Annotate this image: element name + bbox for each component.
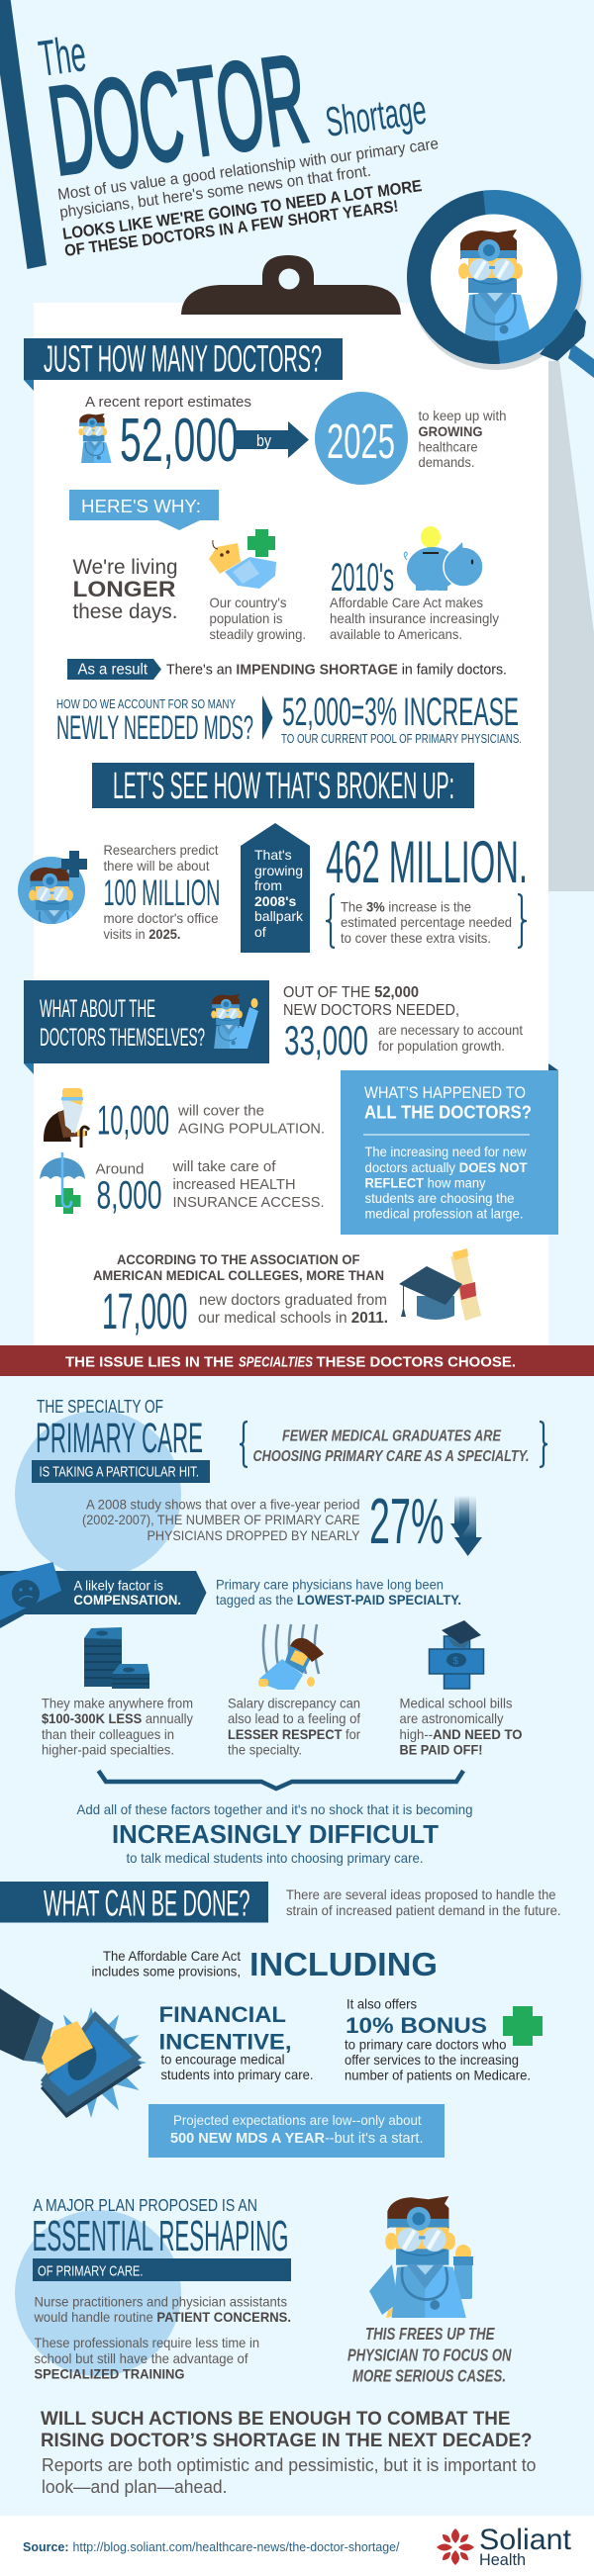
text: new doctors graduated: new doctors graduated from [199,1292,387,1309]
stat: 2010's: 2010's [331,556,394,599]
text: affordable care act [330,595,499,642]
stat circle: 2025 [315,392,408,485]
text: 100 million visits: 100 MILLION [103,873,220,913]
decorative circle: reshaping [15,2210,181,2376]
stat: 27%: 27% [369,1485,444,1557]
panel: growing from 2008: 2008's [254,893,296,909]
closing question [41,2409,537,2497]
callout: frees up the physician: THIS FREES UP THE [365,2324,495,2344]
stat: 52,000: 52,000 [120,407,239,475]
text column: school bills: Medical school bills [400,1696,513,1711]
tag: as a result: As a result [77,661,148,679]
icon: elderly man with cane [44,1088,89,1148]
callout: projected expectations [148,2104,445,2158]
callout: frees up the physician: MORE SERIOUS CASES. [352,2366,506,2386]
reason: living longer: LONGER [73,577,176,601]
text column: less annually: than their colleagues in [42,1726,174,1742]
heading: essential reshaping: A MAJOR PLAN PROPOSED IS AN [34,2195,257,2215]
text: several ideas: There are several ideas proposed to handle the [286,1886,556,1902]
text column: less annually: $100-300K LESS annually [42,1710,193,1726]
text: new doctors graduated [198,1292,388,1327]
text: 100 million visits: more doctor's office [103,910,219,926]
arrow: by: by [256,431,271,450]
question: newly needed mds [56,696,253,747]
text: growing demands: demands. [418,454,475,470]
text: insurance access: INSURANCE ACCESS. [172,1194,325,1211]
closing question: look—and plan—ahead. [42,2477,228,2497]
arrow: by [237,421,309,458]
text: 10% bonus: number of patients on Medicare. [345,2068,531,2083]
text: nurse practitioners: school but still have the advantage of [34,2350,248,2366]
text: 10% bonus: It also offers [346,1996,417,2012]
heading: what can be done [0,1882,268,1923]
panel: what's happened to all the doctors: doctors actually DOES NOT [364,1159,528,1175]
intro text: physicians, but here's some news on that front. [58,163,372,222]
callout: frees up the physician: PHYSICIAN TO FOCUS ON [347,2345,512,2364]
arrow: falling [450,1496,482,1556]
text: lowest paid specialty [216,1577,461,1608]
heading: specialty of primary care: PRIMARY CARE [36,1415,203,1462]
text: out of the 52,000: OUT OF THE 52,000 [283,984,419,1001]
text: nurse practitioners: SPECIALIZED TRAINING [34,2366,185,2382]
text: aging population: AGING POPULATION. [178,1120,325,1138]
banner: the issue lies in the specialties: THE ISSUE LIES IN THE [65,1353,234,1371]
text: 100 million visits: there will be about [103,858,210,874]
icon: medical school bills [430,1620,483,1689]
text column: school bills [400,1696,523,1757]
text: 2008 study: (2002-2007), THE NUMBER OF PRIMARY CARE [82,1512,360,1527]
brace [99,1771,463,1789]
heading: doctors themselves: DOCTORS THEMSELVES? [40,1024,205,1052]
icon: clipboard clip [181,255,401,315]
question: newly needed mds: HOW DO WE ACCOUNT FOR SO MANY [56,696,236,711]
callout: projected expectations: 500 NEW MDS A YEAR--but it's a start. [170,2130,424,2147]
logo: Soliant Health: Health [479,2550,526,2569]
stat: 3% increase: TO OUR CURRENT POOL OF PRIMARY PHYSICIANS. [281,732,522,746]
logo: Soliant Health [437,2524,572,2569]
ribbon: compensation: COMPENSATION. [73,1592,181,1608]
title: The [36,25,89,87]
title [36,25,429,203]
text: growing demands: GROWING [418,423,483,439]
text: 2008 study [82,1496,360,1543]
text: 100 million visits: Researchers predict [103,842,219,858]
heading: essential reshaping: ESSENTIAL RESHAPING [32,2212,289,2260]
text column: lesser respect: LESSER RESPECT for [228,1726,360,1742]
text: population growth: are necessary to account [378,1022,523,1038]
text: association of american medical colleges: AMERICAN MEDICAL COLLEGES, MORE THAN [93,1268,384,1283]
text column: less annually: higher-paid specialties. [42,1741,174,1757]
heading: essential reshaping: OF PRIMARY CARE. [38,2263,143,2279]
text: aging population [177,1102,325,1138]
arrow: chevron [262,695,273,740]
heading: essential reshaping [32,2195,291,2281]
panel: what's happened to all the doctors: REFLECT how many [364,1175,485,1191]
text: 10% bonus [345,1996,531,2083]
heading: just how many doctors: JUST HOW MANY DOCTORS? [44,338,322,380]
reason: living longer: We're living [73,556,178,579]
icon: sad doctor in rain [258,1624,324,1690]
heading: specialty of primary care [32,1397,210,1483]
callout: here's why [69,490,219,530]
source line: Source: [23,2539,69,2554]
text: nurse practitioners: Nurse practitioners and physician assistants [34,2293,287,2309]
heading: what can be done: WHAT CAN BE DONE? [44,1884,249,1923]
intro text: OF THESE DOCTORS IN A FEW SHORT YEARS! [63,198,399,260]
stat: 17,000: 17,000 [102,1283,188,1339]
logo: Soliant Health: Soliant [479,2524,572,2556]
question: newly needed mds: NEWLY NEEDED MDS? [56,709,253,747]
banner: the issue lies in the specialties [0,1345,594,1376]
text: 2008 study: PHYSICIANS DROPPED BY NEARLY [147,1527,360,1543]
icon: umbrella with plus [40,1152,85,1214]
panel: what's happened to all the doctors: WHAT'S HAPPENED TO [364,1083,526,1102]
text: population growth: for population growth. [378,1038,505,1054]
stat: around 8,000: Around [95,1161,145,1177]
icon: piggy bank [404,526,483,591]
text: affordable care act provisions: The Affordable Care Act [103,1948,241,1964]
callout: frees up the physician [347,2324,512,2386]
reason: living longer: these days. [73,600,178,623]
white clipboard panel [34,303,548,1345]
text: nurse practitioners: These professionals require less time in [34,2335,259,2350]
panel: growing from 2008 [241,823,310,953]
text: population: Our country's [210,595,287,610]
icon: doctor in circle with plus [18,851,87,924]
conclusion: increasingly difficult [77,1801,473,1866]
text: insurance access [171,1158,325,1211]
text: 100 million visits: visits in 2025. [103,926,181,942]
text: population growth [378,1022,523,1054]
panel: growing from 2008: ballpark [254,908,304,924]
title: Shortage [323,86,429,145]
panel: growing from 2008: That's [254,847,292,863]
banner: the issue lies in the specialties: SPECIALTIES [239,1353,313,1371]
heading: let's see [92,763,474,808]
bracketed callout: fewer graduates: CHOOSING PRIMARY CARE AS A SPECIALTY. [253,1448,529,1465]
header accent bar [0,0,47,269]
icon: green plus [503,2006,543,2046]
recent report label: A recent report estimates [85,394,251,411]
bracketed callout: fewer graduates: FEWER MEDICAL GRADUATES ARE [282,1428,502,1444]
ribbon: compensation [0,1562,206,1628]
text: association of american medical colleges [93,1252,384,1283]
text: association of american medical colleges: ACCORDING TO THE ASSOCIATION OF [117,1252,360,1267]
conclusion: increasingly difficult: Add all of these factors together and it's no shock that it is becoming [77,1801,473,1817]
intro text [56,136,440,260]
bracketed note: 3% increase: to cover these extra visits. [341,930,491,946]
text: 100 million visits [103,842,220,942]
text: financial incentive [158,2002,313,2082]
text column: lesser respect: the specialty. [228,1741,302,1757]
text column: less annually [42,1696,193,1757]
text column: lesser respect: Salary discrepancy can [228,1696,360,1711]
closing question: WILL SUCH ACTIONS BE ENOUGH TO COMBAT THE [41,2409,511,2430]
text: growing demands: healthcare [418,439,478,455]
text: 10% bonus: 10% BONUS [346,2013,487,2038]
icon: swaddled baby with plus [209,529,276,589]
icon: doctor small [78,414,112,463]
icon: hand holding money [0,1988,147,2118]
icon: sad money [0,1562,61,1620]
text: impending shortage: There's an IMPENDING SHORTAGE in family doctors. [166,661,507,679]
conclusion: increasingly difficult: INCREASINGLY DIFFICULT [112,1821,439,1849]
heading: specialty of primary care: THE SPECIALTY OF [37,1397,163,1417]
bracketed callout: fewer graduates [240,1422,547,1467]
text: financial incentive: INCENTIVE, [158,2030,291,2054]
heading: doctors themselves [24,980,269,1074]
text: financial incentive: FINANCIAL [158,2002,286,2027]
text: out of the 52,000 [283,984,459,1019]
closing question: Reports are both optimistic and pessimistic, but it is important to [42,2455,537,2475]
intro text: LOOKS LIKE WE'RE GOING TO NEED A LOT MORE [61,177,423,243]
panel: what's happened to all the doctors: The increasing need for new [364,1144,527,1159]
text: population: steadily growing. [210,626,306,642]
reason: living longer [73,556,178,623]
text: aging population: will cover the [177,1102,264,1120]
decorative circle: primary care [15,1411,181,1577]
text: several ideas: strain of increased patient demand in the future. [286,1902,560,1918]
ribbon: compensation: A likely factor is [73,1577,163,1593]
text: lowest paid specialty: Primary care physicians have long been [216,1577,444,1593]
text: out of the 52,000: NEW DOCTORS NEEDED, [283,1002,459,1019]
text: new doctors graduated: our medical schools in 2011. [198,1310,388,1327]
heading: just how many doctors [24,338,343,391]
bracketed note: 3% increase: The 3% increase is the [341,898,471,914]
heading: including: INCLUDING [249,1947,438,1983]
stat circle: 2025: 2025 [327,415,395,469]
panel: growing from 2008: growing [254,863,303,878]
heading: specialty of primary care: IS TAKING A PARTICULAR HIT. [40,1464,199,1480]
text: insurance access: increased HEALTH [172,1176,295,1193]
callout: projected expectations: Projected expectations are low--only about [173,2112,422,2128]
bracketed note: 3% increase [326,894,527,948]
panel: what's happened to all the doctors: ALL THE DOCTORS? [364,1102,532,1122]
text column: school bills: BE PAID OFF! [400,1741,483,1757]
text: several ideas [286,1886,560,1918]
text column: lesser respect [228,1696,360,1757]
panel: what's happened to all the doctors [341,1063,558,1235]
text: affordable care act: Affordable Care Act makes [330,595,483,610]
text: affordable care act provisions [91,1948,241,1978]
source line: http://blog.soliant.com/healthcare-news/the-doctor-shortage/ [73,2539,400,2554]
tag: as a result [67,659,161,680]
stat: around 8,000: 8,000 [97,1173,162,1217]
intro text: Most of us value a good relationship with our primary care [56,136,440,204]
text column: school bills: high--AND NEED TO [400,1726,523,1742]
closing question: RISING DOCTOR’S SHORTAGE IN THE NEXT DECADE? [41,2431,533,2451]
text: nurse practitioners [34,2293,291,2382]
text: lowest paid specialty: tagged as the LOWEST-PAID SPECIALTY. [216,1592,461,1608]
text: growing demands [418,408,507,470]
text column: less annually: They make anywhere from [42,1696,193,1711]
text: population [210,595,306,642]
conclusion: increasingly difficult: to talk medical students into choosing primary care. [127,1850,424,1866]
heading: doctors themselves: WHAT ABOUT THE [40,995,155,1023]
panel: what's happened to all the doctors: medical profession at large. [364,1205,523,1221]
text column: lesser respect: also lead to a feeling of [228,1710,360,1726]
text: growing demands: to keep up with [418,408,507,423]
icon: doctor with raised hand [369,2196,473,2318]
text: insurance access: will take care of [171,1158,276,1175]
banner: the issue lies in the specialties: THESE DOCTORS CHOOSE. [317,1353,516,1371]
icon: magnifying glass with doctor [407,190,594,378]
text: 10% bonus: to primary care doctors who [345,2036,507,2052]
panel: growing from 2008: of [254,924,266,940]
panel: what's happened to all the doctors: students are choosing the [364,1190,515,1206]
text: affordable care act: health insurance increasingly [330,610,499,626]
icon: money stacks [84,1627,149,1689]
text: financial incentive: students into primary care. [160,2067,313,2082]
icon: graduation cap and diploma [399,1248,481,1321]
magnifier shadow band [548,361,594,891]
stat: 10,000: 10,000 [97,1096,169,1144]
icon: medical school bills: $ [453,1656,459,1667]
text: population: population is [210,610,283,626]
callout: here's why: HERE'S WHY: [81,496,201,516]
stat: 3% increase [281,690,522,746]
text: nurse practitioners: would handle routine PATIENT CONCERNS. [34,2309,291,2325]
stat: around 8,000 [95,1161,162,1217]
footer band [0,2516,594,2576]
bracketed note: 3% increase: estimated percentage needed [341,914,512,930]
panel: growing from 2008: from [254,877,282,893]
text: 2008 study: A 2008 study shows that over a five-year period [86,1496,360,1512]
text: 10% bonus: offer services to the increasing [345,2052,519,2068]
text: financial incentive: to encourage medical [160,2052,285,2068]
text column: school bills: are astronomically [400,1710,503,1726]
stat: 33,000: 33,000 [284,1017,368,1063]
text: affordable care act provisions: includes some provisions, [91,1963,241,1978]
icon: doctor raising hand [211,994,258,1049]
text: affordable care act: available to Americans. [330,626,462,642]
